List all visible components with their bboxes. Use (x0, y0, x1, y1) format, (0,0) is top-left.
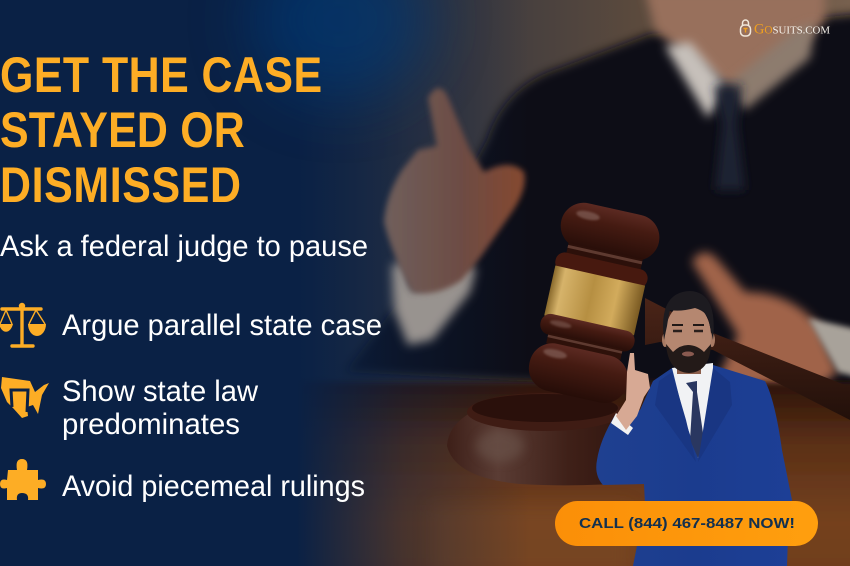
white collar left (665, 42, 725, 118)
navy left panel overlay (0, 0, 530, 566)
brows (672, 324, 704, 326)
shirt cuff (611, 413, 633, 435)
judge chin and neck (645, 0, 825, 90)
bullet: avoid piecemeal rulings: Avoid piecemeal rulings (62, 470, 365, 503)
sleeve cuff (392, 262, 476, 345)
icon: US map (1, 377, 49, 418)
raised hand of judge (384, 88, 525, 345)
face (665, 303, 711, 369)
blue glow (250, 0, 430, 100)
right cuff (808, 318, 850, 378)
bullet list: predominates (62, 408, 240, 441)
title: STAYED OR (0, 102, 245, 158)
beard (666, 344, 711, 373)
title (0, 47, 322, 213)
eyes (673, 330, 703, 332)
collar right (725, 22, 815, 110)
bullet list (0, 303, 382, 503)
icon: lock (740, 20, 750, 36)
icon: scales of justice (0, 303, 46, 346)
handle (645, 298, 850, 420)
hand with raised finger (616, 353, 650, 430)
icon: puzzle piece (0, 459, 46, 500)
shirt (672, 363, 713, 458)
hand (384, 88, 525, 293)
gavel head (524, 198, 664, 407)
judge robe (345, 10, 850, 400)
table (0, 382, 850, 566)
bullet: state law predominates: Show state law (62, 375, 258, 408)
table sheen (430, 505, 630, 566)
judge tie (714, 85, 745, 190)
hair (663, 291, 714, 340)
gavel (524, 198, 850, 420)
call to action button: CALL (844) 467-8487 NOW! (579, 516, 795, 532)
lips (682, 352, 694, 356)
right hand (692, 252, 838, 410)
lapels (655, 372, 696, 462)
gavel sound block (447, 393, 650, 485)
neck (677, 360, 701, 374)
presenter in blue suit (596, 291, 792, 566)
logo wordmark: GOSUITS.COM (754, 22, 830, 38)
bullet: parallel state case: Argue parallel state case (62, 309, 382, 342)
tie (686, 381, 704, 458)
title: GET THE CASE (0, 47, 322, 103)
subtitle: Ask a federal judge to pause (0, 230, 368, 263)
logo: GoSuits.com (740, 20, 830, 38)
ears (662, 333, 668, 347)
title: DISMISSED (0, 157, 241, 213)
call to action button (555, 501, 818, 546)
suit body and arms (596, 365, 792, 566)
